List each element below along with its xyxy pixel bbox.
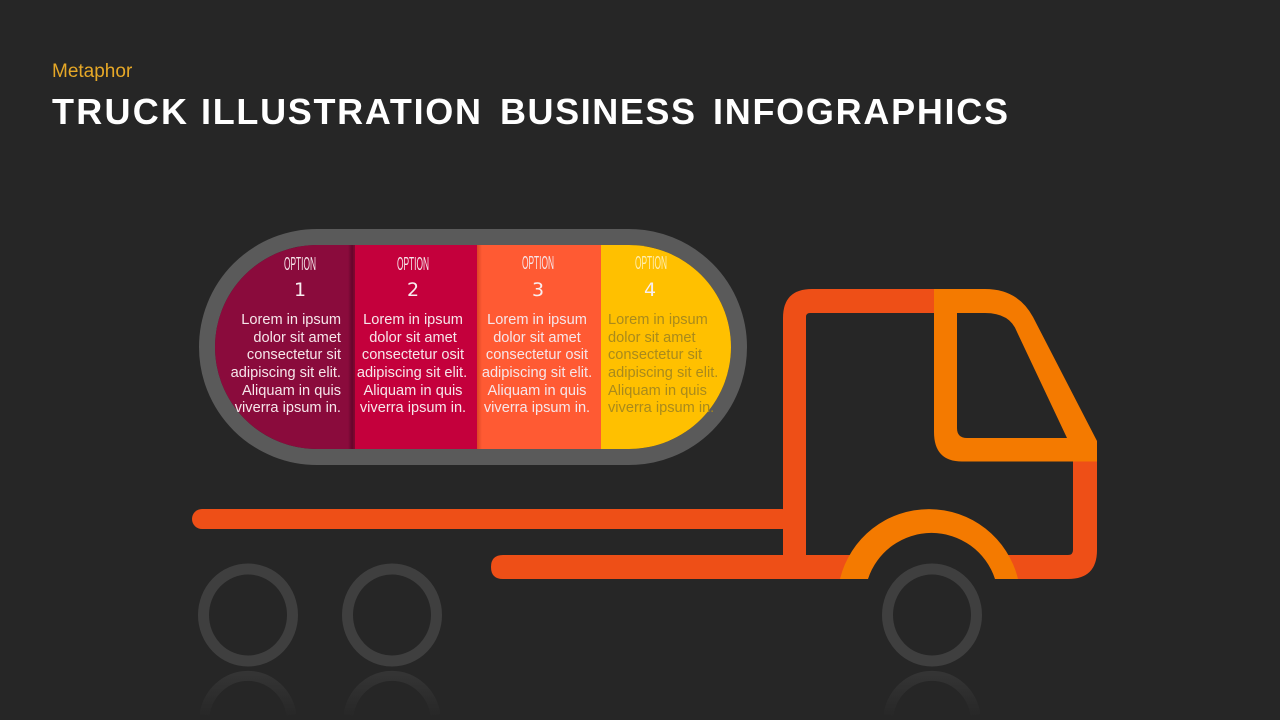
option 3: Lorem in ipsum bbox=[487, 312, 587, 328]
option 1: viverra ipsum in. bbox=[235, 400, 341, 416]
option 4: adipiscing sit elit. bbox=[608, 365, 718, 381]
option 3: viverra ipsum in. bbox=[484, 400, 590, 416]
option 1: Lorem in ipsum bbox=[241, 312, 341, 328]
option 4: consectetur sit bbox=[608, 347, 702, 363]
title: ILLUSTRATION bbox=[201, 91, 481, 132]
option 3: 3 bbox=[532, 279, 544, 301]
option 1: Aliquam in quis bbox=[242, 383, 341, 399]
option 3: dolor sit amet bbox=[493, 330, 581, 346]
option 2: Aliquam in quis bbox=[364, 383, 462, 399]
option 3: Aliquam in quis bbox=[488, 383, 586, 399]
option 4: dolor sit amet bbox=[608, 330, 696, 346]
option 4 bbox=[608, 253, 718, 416]
option 2: consectetur osit bbox=[362, 347, 464, 363]
truck chassis upper bar bbox=[192, 509, 792, 529]
wheels bbox=[204, 569, 976, 661]
option 2: OPTION bbox=[397, 254, 429, 274]
option 2 bbox=[357, 254, 467, 416]
option 4: Lorem in ipsum bbox=[608, 312, 708, 328]
option 2: Lorem in ipsum bbox=[363, 312, 463, 328]
title: TRUCK bbox=[52, 91, 187, 132]
option 4: OPTION bbox=[635, 253, 667, 273]
option 4: 4 bbox=[644, 279, 656, 301]
option 2: viverra ipsum in. bbox=[360, 400, 466, 416]
tank coloured segments bbox=[215, 245, 731, 449]
title: BUSINESS bbox=[500, 91, 695, 132]
option 2: 2 bbox=[407, 279, 419, 301]
option 2: dolor sit amet bbox=[369, 330, 457, 346]
option 3 bbox=[482, 253, 592, 416]
title: INFOGRAPHICS bbox=[713, 91, 1008, 132]
option 1 bbox=[231, 254, 341, 416]
option 1: OPTION bbox=[284, 254, 316, 274]
truck cab window bbox=[934, 289, 1097, 462]
option 3: OPTION bbox=[522, 253, 554, 273]
option 4: viverra ipsum in. bbox=[608, 400, 714, 416]
option 1: dolor sit amet bbox=[253, 330, 341, 346]
option 1: 1 bbox=[294, 279, 306, 301]
eyebrow: Metaphor: Metaphor bbox=[52, 61, 133, 82]
truck body bbox=[491, 289, 1097, 579]
wheel reflections bbox=[204, 676, 976, 715]
option 1: consectetur sit bbox=[247, 347, 341, 363]
option 3: adipiscing sit elit. bbox=[482, 365, 592, 381]
tank outer ring bbox=[207, 237, 739, 457]
front wheel arch bbox=[840, 509, 1018, 579]
option 4: Aliquam in quis bbox=[608, 383, 707, 399]
option 1: adipiscing sit elit. bbox=[231, 365, 341, 381]
title bbox=[52, 91, 1008, 132]
truck tank: four option capsule bbox=[207, 237, 739, 457]
option 2: adipiscing sit elit. bbox=[357, 365, 467, 381]
option 3: consectetur osit bbox=[486, 347, 588, 363]
